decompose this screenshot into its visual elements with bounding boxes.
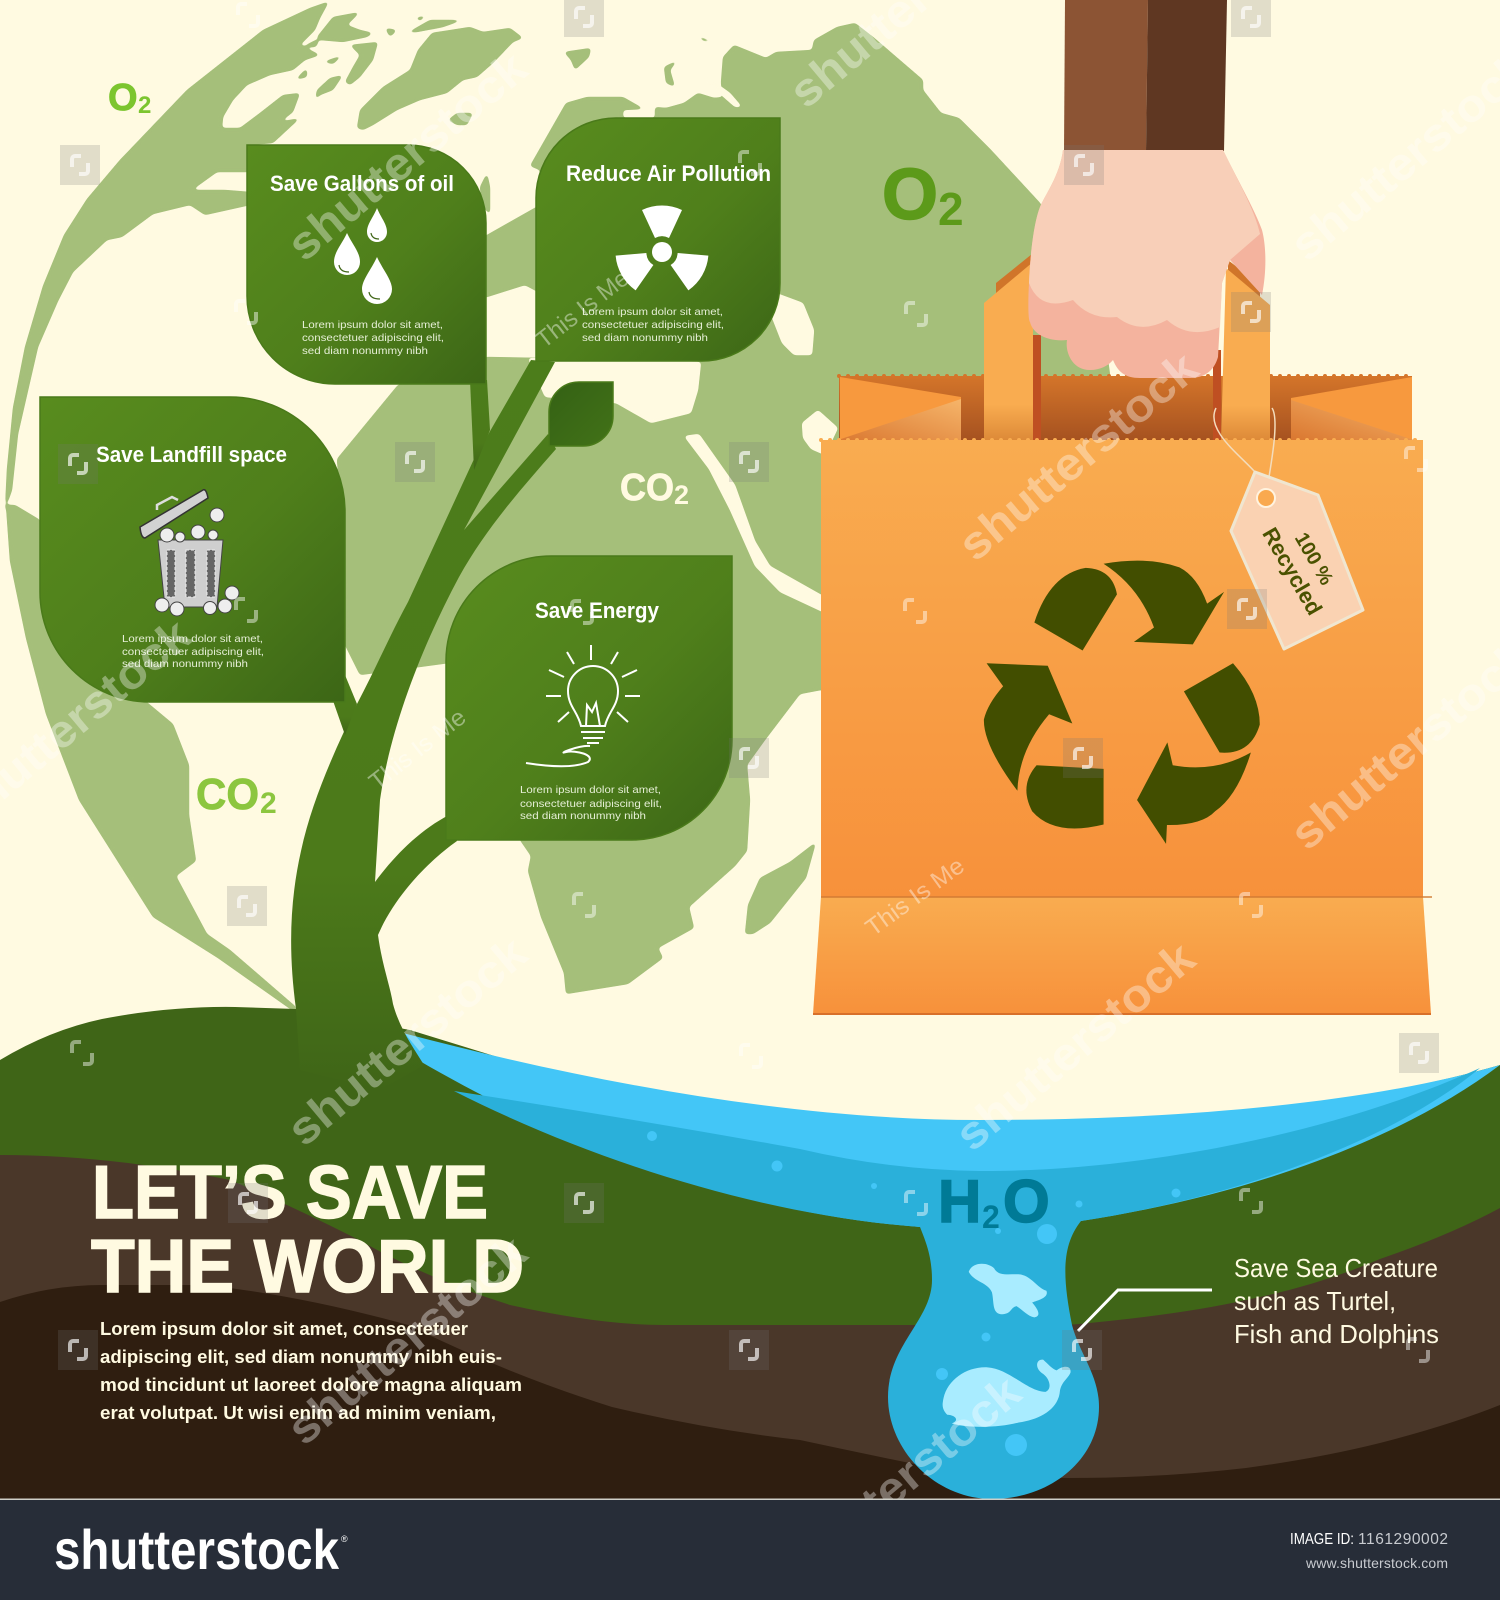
body text: consectetuer adipiscing elit, — [582, 319, 724, 331]
body text: consectetuer adipiscing elit, — [122, 646, 264, 658]
bag front — [821, 440, 1423, 897]
small leaf — [549, 382, 613, 446]
leaf panel: save landfill space — [40, 397, 345, 702]
Greenland — [357, 27, 523, 130]
price tag — [1214, 408, 1363, 649]
heading: Save Landfill space — [96, 442, 287, 467]
body text: Lorem ipsum dolor sit amet, — [520, 784, 661, 796]
bag bottom fold — [813, 897, 1431, 1014]
right flap — [1291, 377, 1420, 442]
left flap — [832, 377, 961, 442]
H2O label: H — [938, 1168, 981, 1235]
twig to landfill leaf — [331, 675, 357, 735]
intro paragraph: erat volutpat. Ut wisi enim ad minim veniam, — [100, 1403, 496, 1423]
callout text: Fish and Dolphins — [1234, 1319, 1439, 1349]
callout connector — [1078, 1290, 1212, 1331]
Madagascar — [745, 842, 816, 934]
bubbles — [647, 1131, 1180, 1456]
body text: sed diam nonummy nibh — [520, 810, 646, 822]
watermark overlay: shutterstock — [945, 931, 1205, 1161]
tag body — [1231, 472, 1363, 649]
brown soil — [0, 1155, 1500, 1500]
hand top — [1029, 150, 1260, 332]
body text: sed diam nonummy nibh — [582, 332, 708, 344]
intro paragraph: mod tincidunt ut laoreet dolore magna aliquam — [100, 1375, 522, 1395]
North America land — [5, 0, 333, 510]
title — [91, 1150, 524, 1308]
O2 small label: O — [108, 77, 138, 119]
paper bag — [813, 254, 1432, 1014]
tag string — [1214, 408, 1275, 495]
leaf panel: save gallons of oil — [247, 145, 486, 384]
body text: sed diam nonummy nibh — [122, 658, 248, 670]
tag text — [1257, 512, 1347, 619]
right handle — [1221, 260, 1270, 440]
CO2 white label: CO — [620, 467, 674, 509]
callout text: Save Sea Creature — [1234, 1253, 1438, 1283]
H2O label: 2 — [982, 1199, 1000, 1235]
H2O label: O — [1003, 1168, 1050, 1235]
leaf shape — [536, 118, 780, 361]
body text: Lorem ipsum dolor sit amet, — [302, 319, 443, 331]
green hill — [0, 1007, 1500, 1400]
title: LET’S SAVE — [92, 1150, 488, 1234]
CO2 white label: 2 — [674, 480, 689, 510]
image id: IMAGE ID: — [1290, 1531, 1354, 1548]
H2O label — [938, 1168, 1050, 1235]
O2 large label: O — [882, 155, 938, 235]
hand shadow and fingers — [1028, 150, 1265, 378]
turtle and whale — [943, 1264, 1071, 1427]
seas cut out of the land — [528, 77, 838, 613]
leaf shape — [40, 397, 345, 702]
icon: recycle symbol — [984, 561, 1260, 844]
intro paragraph — [100, 1319, 522, 1423]
intro paragraph: adipiscing elit, sed diam nonummy nibh euis- — [100, 1347, 502, 1367]
tag text: Recycled — [1257, 523, 1327, 619]
watermark overlay: shutterstock — [277, 926, 537, 1156]
inner handle strips — [1033, 335, 1221, 440]
body text: Lorem ipsum dolor sit amet, — [122, 633, 263, 645]
turtle — [969, 1264, 1047, 1317]
watermark overlay: shutterstock — [948, 341, 1208, 571]
tag text: 100 % — [1290, 529, 1337, 589]
callout text: such as Turtel, — [1234, 1286, 1396, 1316]
footer bar — [0, 1498, 1500, 1600]
dark soil — [0, 1285, 1500, 1500]
watermark overlay: This Is Me — [861, 852, 970, 942]
whale — [943, 1360, 1071, 1427]
body text: Lorem ipsum dolor sit amet, — [582, 306, 723, 318]
Iceland and Britain — [448, 113, 490, 215]
Persian gulf — [802, 410, 838, 455]
left handle — [984, 254, 1033, 440]
Mediterranean — [528, 358, 701, 423]
intro paragraph: Lorem ipsum dolor sit amet, consectetuer — [100, 1319, 468, 1339]
Eurasia and Africa land — [337, 23, 1110, 994]
CO2 green label: 2 — [260, 787, 277, 820]
leaf shape — [247, 145, 486, 384]
South America and limb land — [6, 505, 296, 1013]
title: THE WORLD — [91, 1224, 524, 1308]
tree — [291, 360, 556, 1090]
watermark overlay: shutterstock — [277, 1225, 537, 1455]
trunk and branches — [291, 360, 556, 1090]
callout text — [1234, 1253, 1439, 1349]
image id: 1161290002 — [1358, 1531, 1448, 1548]
body text — [302, 319, 444, 357]
Red sea — [684, 434, 825, 613]
icon: trash can — [140, 490, 239, 616]
body text: sed diam nonummy nibh — [302, 345, 428, 357]
Black sea — [771, 293, 814, 355]
footer logo: ® — [341, 1534, 348, 1544]
watermark overlay: This Is Me — [531, 265, 634, 354]
heading: Reduce Air Pollution — [566, 161, 771, 186]
watermark overlay: This Is Me — [364, 704, 471, 796]
heading: Save Energy — [535, 598, 660, 623]
footer logo: shutterstock — [54, 1518, 340, 1581]
website: www.shutterstock.com — [1305, 1555, 1448, 1571]
icon: radiation — [612, 206, 712, 293]
image id — [1290, 1531, 1448, 1548]
globe map — [5, 0, 1110, 1013]
tag hole — [1257, 489, 1275, 507]
body text — [122, 633, 264, 670]
twig to oil leaf — [470, 380, 490, 470]
CO2 green label: CO — [196, 770, 259, 819]
watermark overlay: shutterstock — [771, 1365, 1031, 1595]
O2 large label: 2 — [938, 183, 964, 235]
heading: Save Gallons of oil — [270, 171, 454, 196]
bag back panel — [839, 376, 1412, 440]
hand — [1028, 150, 1265, 378]
body text: consectetuer adipiscing elit, — [520, 798, 662, 810]
arctic islands — [295, 12, 716, 100]
O2 small label — [108, 77, 151, 119]
icon: light bulb — [526, 645, 640, 766]
body text — [582, 306, 724, 344]
body text — [520, 784, 662, 822]
leaf panel: reduce air pollution — [536, 118, 780, 361]
body text: consectetuer adipiscing elit, — [302, 332, 444, 344]
water — [403, 1033, 1500, 1499]
deep water and drop — [454, 1068, 1480, 1499]
water surface — [403, 1033, 1500, 1227]
leaf shape — [446, 556, 732, 840]
watermark overlay: shutterstock — [277, 41, 537, 271]
arm sleeve — [1064, 0, 1227, 151]
icon: oil drops — [334, 208, 392, 304]
O2 large label — [882, 155, 964, 235]
leaf panel: save energy — [446, 556, 732, 840]
O2 small label: 2 — [138, 92, 151, 119]
Arctic inlet — [701, 77, 742, 107]
